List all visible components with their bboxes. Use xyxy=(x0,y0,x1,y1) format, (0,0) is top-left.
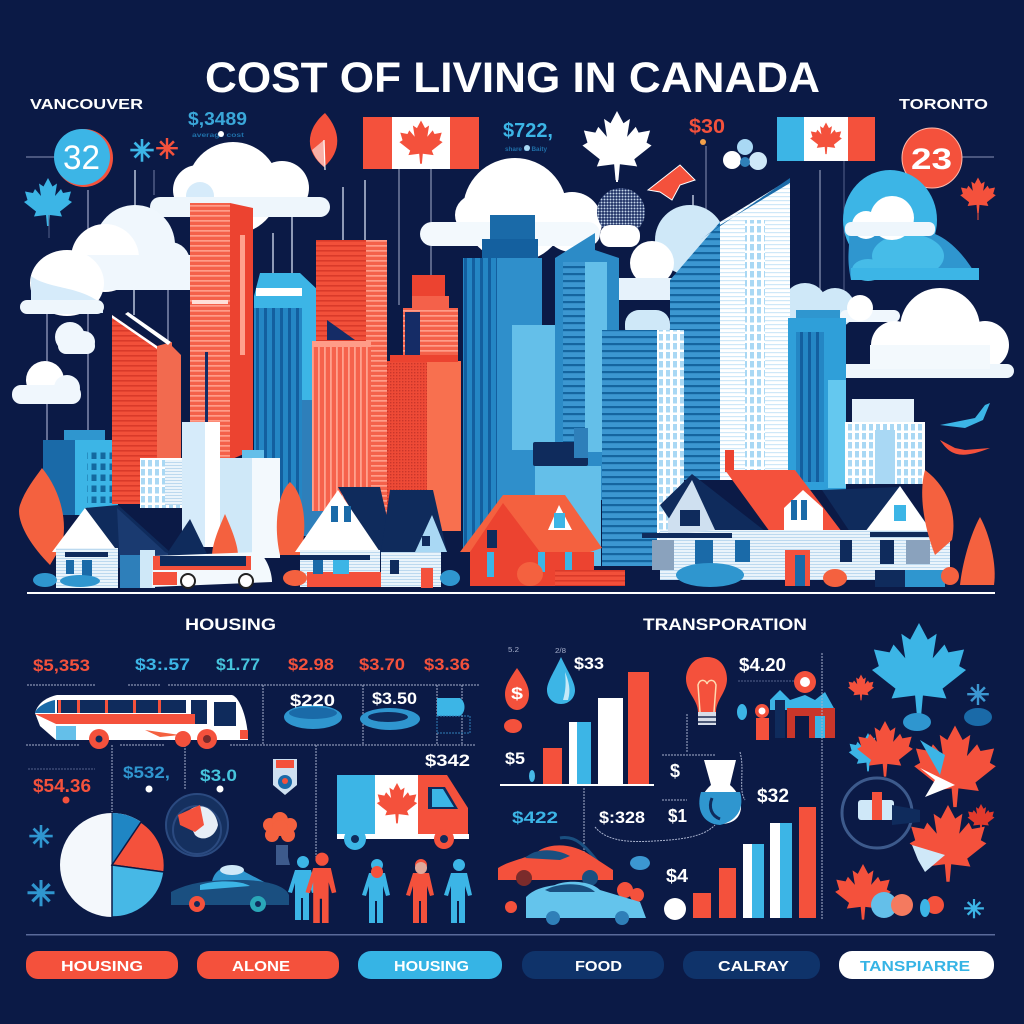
leaf: bottom group xyxy=(835,864,984,920)
icon: blue water drop xyxy=(547,648,575,704)
pill: housing blue xyxy=(358,951,502,979)
badge: 32: 32 xyxy=(63,139,100,177)
icon: red dollar drop: $ xyxy=(511,684,524,703)
cloud: small lower xyxy=(12,361,81,404)
antennas xyxy=(47,170,693,440)
building: mid blue striped tower xyxy=(602,330,684,566)
illustration: city skyline xyxy=(12,142,1014,594)
illustration: family at market xyxy=(737,671,835,740)
price: dollar signs: $:328 xyxy=(599,808,645,827)
price plate: $3.50 xyxy=(360,689,420,730)
chart: bar chart bottom xyxy=(693,807,816,918)
building: salmon main tower xyxy=(190,203,253,468)
cloud: large right xyxy=(830,288,1014,378)
price: $,3489: average cost xyxy=(192,133,244,139)
building: front teal low block xyxy=(533,428,601,566)
house: red xyxy=(460,495,625,586)
cloud: left back xyxy=(71,205,193,292)
pill: calray xyxy=(683,951,820,979)
price: $30 xyxy=(689,116,725,212)
cloud: small upper xyxy=(55,322,95,354)
icon: flowers xyxy=(130,138,178,162)
building: right glass tower xyxy=(788,310,846,490)
cloud: right of centre xyxy=(618,205,725,342)
leaf: big red and white xyxy=(914,726,996,807)
tree: left red leaf xyxy=(19,468,64,565)
price: $33: $33 xyxy=(574,654,604,673)
leaf: red white lower xyxy=(910,805,986,882)
illustration: bus xyxy=(35,695,248,749)
city label: Vancouver: VANCOUVER xyxy=(30,96,143,113)
price: $4.20 xyxy=(738,655,795,681)
cloud: centre xyxy=(420,158,645,262)
icon: white maple leaf xyxy=(582,111,652,182)
house: middle xyxy=(295,487,447,588)
divider line xyxy=(26,934,995,936)
building: red wide block xyxy=(387,355,461,531)
pill: alone xyxy=(197,951,339,979)
pill: food xyxy=(522,951,664,979)
birds xyxy=(940,403,990,455)
panel: housing xyxy=(26,615,480,923)
building: salmon striped xyxy=(312,341,371,511)
pill: food: FOOD xyxy=(575,958,622,975)
building: blue glass tower xyxy=(555,233,619,500)
building: left teal block xyxy=(43,430,118,515)
building: right white block xyxy=(845,399,925,484)
icon: snowflakes xyxy=(28,825,54,906)
building: blue mid tower xyxy=(254,273,327,536)
building: red stepped top xyxy=(403,275,458,363)
badge: 23 xyxy=(902,128,994,188)
tree: red cone right xyxy=(960,517,995,585)
icon: red flower xyxy=(263,812,297,842)
chart: pie xyxy=(60,813,164,917)
heading: housing: HOUSING xyxy=(185,615,276,634)
icon: bird paper red xyxy=(648,165,695,200)
leaf: small red xyxy=(848,674,874,700)
illustration: blue car xyxy=(505,882,646,925)
city label: Toronto: TORONTO xyxy=(899,96,988,113)
pill: tansparre xyxy=(839,951,994,979)
price: $,3489: $,3489 xyxy=(188,109,247,129)
house: left xyxy=(52,505,208,588)
building: white angled tower xyxy=(670,178,790,480)
building: red right tower xyxy=(316,240,387,540)
icon: red maple leaf xyxy=(960,178,996,220)
pill: tansparre: TANSPIARRE xyxy=(860,958,970,975)
legend pills xyxy=(26,951,994,979)
leaf: large blue xyxy=(872,623,966,731)
price: $722 xyxy=(503,120,553,153)
illustration: delivery van xyxy=(337,775,469,850)
panel: transportation xyxy=(498,615,996,925)
title: COST OF LIVING IN CANADA xyxy=(205,54,820,102)
chart: bar chart top xyxy=(500,672,654,786)
icon: lens ring xyxy=(842,778,920,848)
prices row: $3:.57 xyxy=(135,655,190,674)
icon: small grey bust xyxy=(276,845,290,865)
price: dollar signs: $ xyxy=(670,761,680,781)
icon: water vase xyxy=(699,760,741,825)
dotted frame xyxy=(584,714,745,862)
badge: 23: 23 xyxy=(911,143,952,176)
icon: globe with plug xyxy=(166,794,228,856)
illustration: blue car xyxy=(171,865,289,912)
price: dollar signs xyxy=(599,761,789,886)
cloud: behind right tower xyxy=(783,283,900,328)
price: $3.0 xyxy=(200,766,237,792)
icon: red feather leaf xyxy=(310,113,337,170)
prices row: $5,353 xyxy=(33,656,90,675)
ground line xyxy=(27,592,995,594)
illustration: small bus xyxy=(152,552,272,588)
cloud: top centre-left xyxy=(150,142,330,234)
prices row: $3.36 xyxy=(424,655,470,674)
pill: alone: ALONE xyxy=(232,958,290,975)
price: $54.36: $54.36 xyxy=(33,776,91,796)
icon: small blue badge xyxy=(630,856,650,870)
price: $422: $422 xyxy=(512,808,558,827)
icon: flakes top right xyxy=(964,684,992,726)
icon: red dollar drop: 5.2 xyxy=(508,647,519,654)
price: dollar signs: $32 xyxy=(757,786,789,807)
heading: transportation: TRANSPORATION xyxy=(643,615,807,634)
icon: people pair xyxy=(288,853,336,923)
tree: red right xyxy=(922,470,953,555)
pill: housing blue: HOUSING xyxy=(394,958,469,975)
icon: red dollar drop xyxy=(505,647,529,710)
icon: blue maple leaf xyxy=(24,178,72,238)
price: $4.20: $4.20 xyxy=(739,655,786,675)
building: white low left xyxy=(140,352,280,558)
illustration: red car xyxy=(498,837,613,886)
cloud: left front xyxy=(20,250,104,316)
leaf: red and blue xyxy=(849,721,913,777)
prices row: $1.77 xyxy=(216,655,260,674)
icon: helmet xyxy=(437,698,470,733)
bushes xyxy=(33,562,959,587)
price: $722: $722, xyxy=(503,120,553,142)
pill: housing red xyxy=(26,951,178,979)
pill: calray: CALRAY xyxy=(718,958,789,975)
prices row xyxy=(33,655,470,675)
house: right row xyxy=(642,450,950,587)
icon: light bulb xyxy=(686,657,727,725)
price: $532 xyxy=(123,763,170,792)
price: $,3489 xyxy=(188,109,247,139)
icon: people group xyxy=(362,859,472,923)
price: dollar signs: $1 xyxy=(668,806,687,826)
building: red angled tower xyxy=(112,312,181,504)
price: $5: $5 xyxy=(505,749,525,768)
price: $30: $30 xyxy=(689,116,725,138)
prices row: $3.70 xyxy=(359,655,405,674)
price: dollar signs: $4 xyxy=(666,866,688,886)
icon: shield xyxy=(273,759,297,795)
flag: left xyxy=(363,117,479,305)
price plate: $220: $220 xyxy=(290,691,335,710)
flag: right xyxy=(777,117,875,300)
tree: small red cone left xyxy=(212,514,238,556)
divider vertical xyxy=(821,653,823,920)
connector lines xyxy=(26,685,480,862)
price: $3.0: $3.0 xyxy=(200,766,237,785)
icon: blue balloons xyxy=(723,139,767,170)
price: $722: share of Baity xyxy=(505,147,548,153)
panel: skyline header xyxy=(24,96,996,305)
badge: 32 xyxy=(26,129,113,187)
icon: red ring xyxy=(504,719,522,733)
icon: blue water drop: 2/8 xyxy=(555,648,566,655)
building: deep blue tower xyxy=(463,215,556,548)
price: $342: $342 xyxy=(425,751,470,770)
pill: housing red: HOUSING xyxy=(61,958,143,975)
leaf: small red right xyxy=(968,804,994,831)
cloud: blue circle xyxy=(843,170,979,281)
price: $54.36 xyxy=(28,769,95,804)
tree: red middle xyxy=(277,482,304,555)
icon: white coin xyxy=(664,898,686,920)
prices row: $2.98 xyxy=(288,655,334,674)
price plate: $220 xyxy=(284,691,342,729)
price: $532: $532, xyxy=(123,763,170,782)
price plate: $3.50: $3.50 xyxy=(372,689,417,708)
